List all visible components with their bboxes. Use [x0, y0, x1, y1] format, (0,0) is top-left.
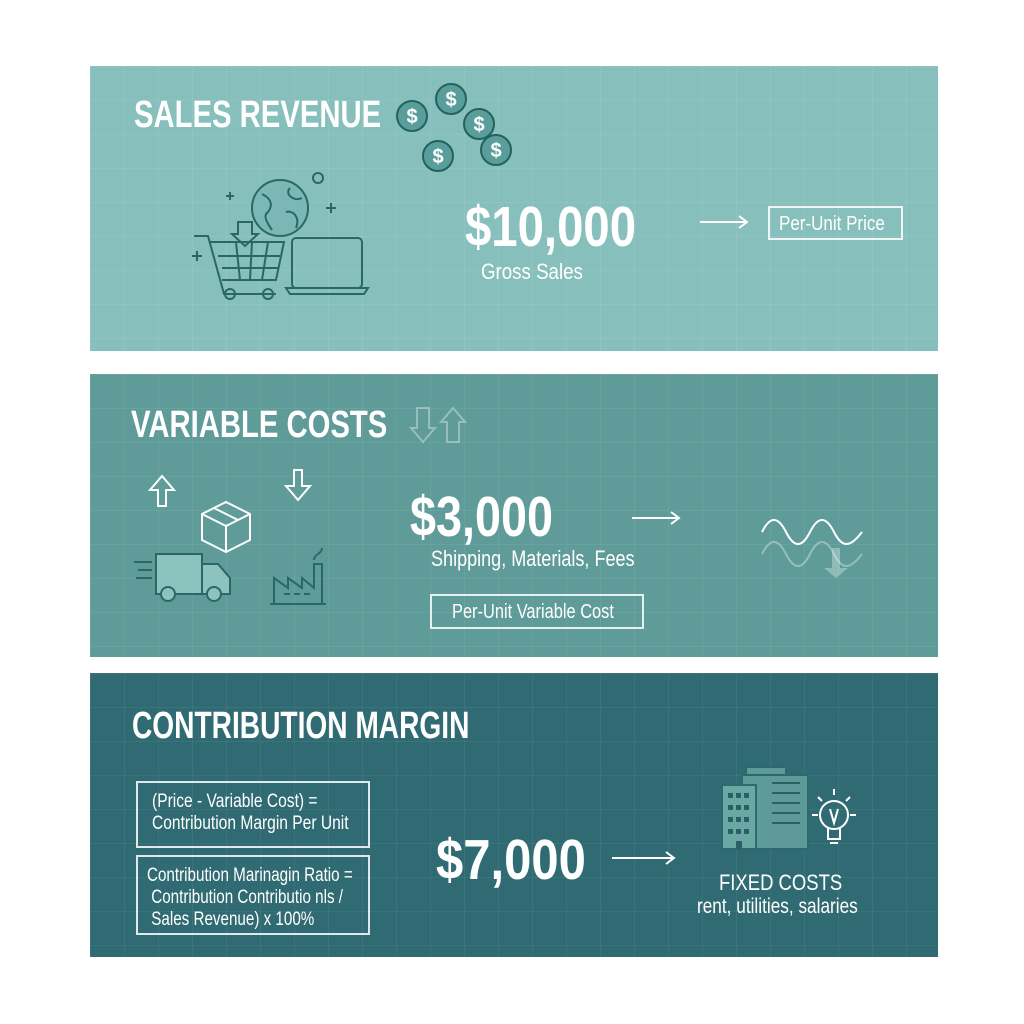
- value: $7,000: $7,000: [436, 828, 586, 892]
- icon: up/down arrows: [409, 406, 467, 444]
- value: $3,000: $3,000: [410, 485, 553, 549]
- text: rent utilities salaries: rent, utilities, salaries: [697, 895, 858, 918]
- label: shipping materials fees: Shipping, Materials, Fees: [431, 546, 635, 571]
- box: formula ratio: Contribution Marinagin Ratio =: [147, 865, 353, 886]
- icon: box, truck, factory: [134, 469, 326, 605]
- icon: coins: [396, 83, 512, 172]
- box: formula per unit: Contribution Margin Per Unit: [152, 813, 349, 834]
- arrow: [632, 511, 680, 525]
- box: formula per unit: [136, 781, 370, 848]
- box: per-unit variable cost: [430, 594, 644, 629]
- icon: coins: $: [406, 106, 418, 128]
- icon: cart, globe, laptop: [192, 172, 370, 300]
- icon: buildings and bulb: [721, 766, 856, 850]
- value: $10,000: $10,000: [465, 195, 636, 259]
- box: formula ratio: Contribution Contributio nls /: [151, 887, 343, 908]
- box: formula per unit: (Price - Variable Cost) =: [152, 791, 318, 812]
- panel: contribution margin: [90, 673, 938, 957]
- box: formula ratio: [136, 855, 370, 935]
- box: per-unit price: Per-Unit Price: [779, 213, 885, 235]
- box: per-unit price: [768, 206, 903, 240]
- heading: contribution margin: CONTRIBUTION MARGIN: [132, 705, 469, 747]
- arrow: [700, 215, 748, 229]
- icon: coins: $: [445, 89, 457, 111]
- text: fixed costs: FIXED COSTS: [719, 870, 842, 895]
- panel: variable costs: [90, 374, 938, 657]
- label: gross sales: Gross Sales: [481, 259, 583, 284]
- icon: coins: $: [473, 114, 485, 136]
- heading: sales revenue: SALES REVENUE: [134, 94, 381, 136]
- panel: sales revenue: [90, 66, 938, 351]
- icon: waves with down arrow: [761, 519, 863, 578]
- heading: variable costs: VARIABLE COSTS: [131, 404, 387, 446]
- arrow: [612, 851, 676, 865]
- icon: coins: $: [432, 146, 444, 168]
- icon: coins: $: [490, 140, 502, 162]
- box: per-unit variable cost: Per-Unit Variable Cost: [452, 601, 614, 623]
- box: formula ratio: Sales Revenue) x 100%: [151, 909, 314, 930]
